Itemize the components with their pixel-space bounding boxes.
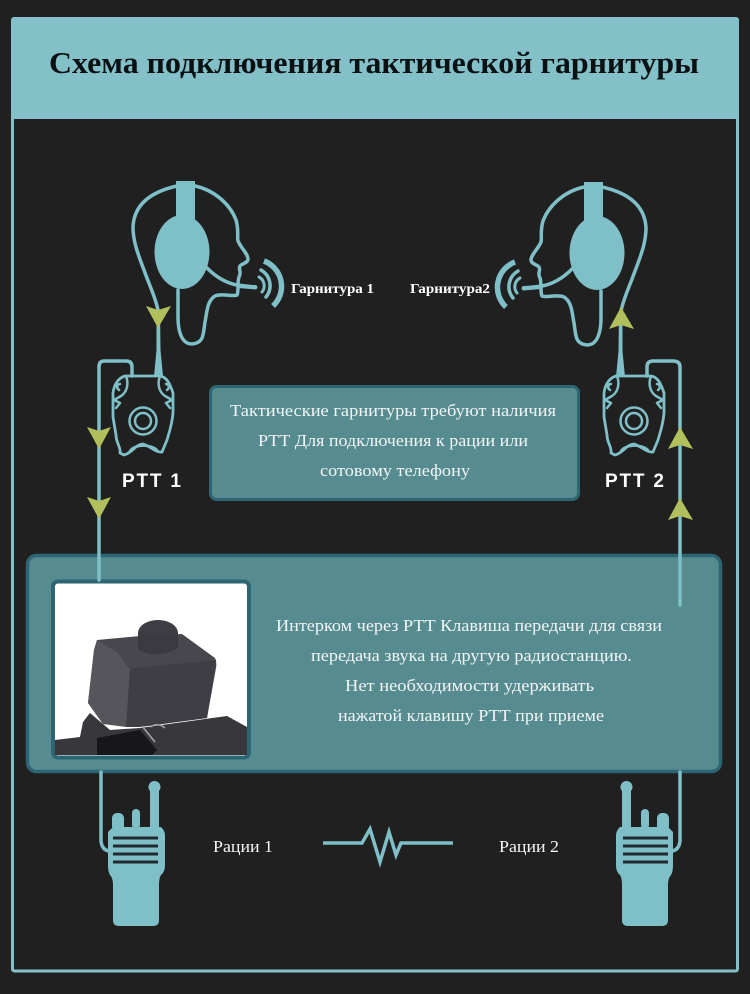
photo: PTT button <box>53 582 249 758</box>
arrow: PTT 2 up lower <box>668 498 693 520</box>
panel: PTT requirement <box>210 386 578 500</box>
arrow: headset 1 down <box>146 306 171 328</box>
radio 1 <box>101 772 165 926</box>
arrow: PTT 1 down upper <box>87 427 111 449</box>
PTT 1 device <box>113 376 173 455</box>
label: PTT 2: PTT 2 <box>605 471 664 492</box>
label: headset 1: Гарнитура 1 <box>291 282 374 297</box>
panel: PTT requirement: сотовому телефону <box>320 461 471 480</box>
radio 2 <box>616 772 680 926</box>
title banner <box>11 17 739 119</box>
panel: intercom description <box>28 556 720 772</box>
arrow: headset 2 up <box>609 307 634 329</box>
panel: PTT requirement: РТТ Для подключения к рации или <box>258 431 528 450</box>
title: Схема подключения тактической гарнитуры <box>49 45 699 80</box>
arrow: PTT 2 up upper <box>668 427 693 449</box>
headset 2 figure <box>497 182 646 377</box>
label: headset 2: Гарнитура2 <box>410 282 490 297</box>
arrow: PTT 1 down lower <box>87 497 111 519</box>
panel: intercom description: Нет необходимости удерживать <box>345 676 594 695</box>
wire: PTT 1 to radio 1 <box>99 361 132 580</box>
panel: PTT requirement: Тактические гарнитуры требуют наличия <box>230 401 556 420</box>
panel: intercom description: Интерком через РТТ Клавиша передачи для связи <box>276 616 662 635</box>
PTT 2 device <box>604 376 664 455</box>
label: radio 1: Рации 1 <box>213 837 273 856</box>
wire: PTT 2 to radio 2 <box>647 361 680 605</box>
panel: intercom description: нажатой клавишу РТТ при приеме <box>338 706 604 725</box>
headset 1 figure <box>133 181 282 376</box>
panel: intercom description: передача звука на другую радиостанцию. <box>311 646 632 665</box>
label: PTT 1: PTT 1 <box>122 471 181 492</box>
label: radio 2: Рации 2 <box>499 837 559 856</box>
icon: signal pulse <box>323 829 453 862</box>
